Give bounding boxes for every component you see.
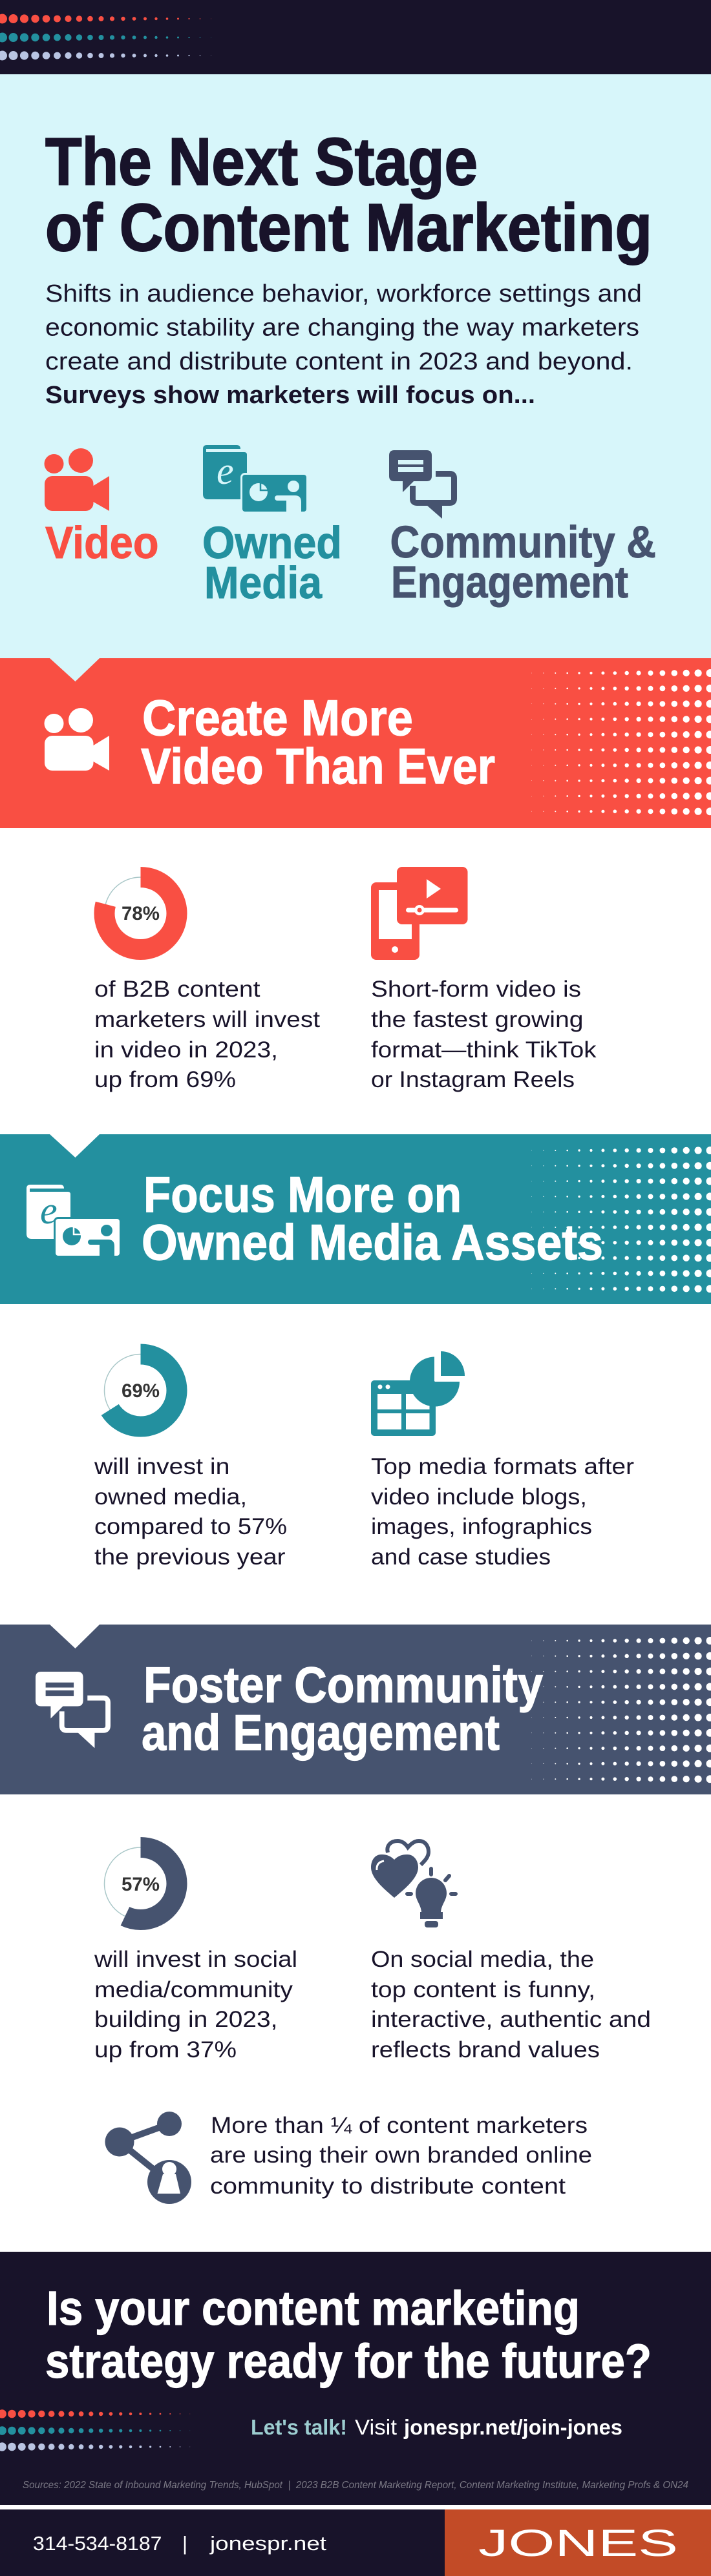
- text: 57 percent stat: media/community: [94, 1977, 293, 2002]
- intro text: [45, 280, 642, 409]
- icon: table and pie chart: [371, 1351, 465, 1436]
- text: phone and website: 314-534-8187: [33, 2532, 162, 2555]
- text: visit link: jonespr.net/join-jones: [403, 2415, 622, 2439]
- text: visit link: Let's talk!: [251, 2415, 347, 2439]
- panel: video stats: [0, 828, 711, 1134]
- text: 57 percent stat: up from 37%: [94, 2037, 237, 2062]
- panel: footer: [0, 2505, 711, 2576]
- icon: video camera white: [44, 708, 109, 771]
- text: social media content: On social media, the: [371, 1947, 594, 1972]
- icon: chat bubbles: [389, 450, 454, 519]
- text: short-form video: or Instagram Reels: [371, 1067, 575, 1092]
- heading: call to action: strategy ready for the future?: [45, 2334, 652, 2388]
- dotted strips: [0, 2409, 190, 2451]
- intro text: economic stability are changing the way marketers: [45, 314, 639, 341]
- text: 78 percent stat: of B2B content: [94, 977, 260, 1002]
- text: 78 percent stat: up from 69%: [94, 1067, 236, 1092]
- icon: share network person: [105, 2112, 191, 2204]
- text: short-form video: the fastest growing: [371, 1007, 583, 1032]
- top dark band with dotted strips: [0, 0, 711, 74]
- panel: intro: [0, 74, 711, 659]
- panel: video banner: [0, 658, 711, 828]
- text: visit link: Visit: [355, 2415, 397, 2439]
- text: 69 percent stat: the previous year: [94, 1544, 286, 1570]
- heading: create more video: Video Than Ever: [141, 738, 495, 795]
- label: owned media: Owned: [202, 517, 342, 568]
- heading: focus more on owned media: [142, 1166, 603, 1271]
- text: phone and website: jonespr.net: [209, 2532, 326, 2555]
- icon: owned media: [203, 445, 306, 512]
- panel: owned media stats: [0, 1304, 711, 1625]
- text: short-form video: Short-form video is: [371, 977, 581, 1002]
- chart: donut 78%: [105, 877, 177, 950]
- panel: community banner: [0, 1625, 711, 1794]
- text: sources: Sources: 2022 State of Inbound Marketing Trends, HubSpot | 2023 B2B Content Marketing Report, Content Marketing Institute, Marketing Profs & ON24: [23, 2480, 688, 2491]
- text: 78 percent stat: [94, 977, 320, 1092]
- text: visit link: [251, 2415, 622, 2439]
- panel: community stats: [0, 1794, 711, 2252]
- heading: focus more on owned media: Focus More on: [143, 1166, 462, 1223]
- text: 69 percent stat: owned media,: [94, 1484, 247, 1510]
- text: 78 percent stat: in video in 2023,: [94, 1037, 278, 1063]
- text: social media content: interactive, authentic and: [371, 2007, 651, 2032]
- panel: owned media banner: [0, 1134, 711, 1304]
- text: branded community: community to distribute content: [210, 2174, 566, 2199]
- text: 69 percent stat: compared to 57%: [94, 1514, 287, 1539]
- heading: call to action: [45, 2281, 652, 2388]
- text: top media formats: images, infographics: [371, 1514, 592, 1539]
- heading: focus more on owned media: Owned Media Assets: [142, 1214, 603, 1271]
- heading: call to action: Is your content marketing: [47, 2281, 580, 2335]
- text: short-form video: [371, 977, 597, 1092]
- text: 57 percent stat: [94, 1947, 297, 2062]
- text: phone and website: |: [182, 2532, 187, 2555]
- icon: owned media: e: [217, 450, 234, 492]
- text: 69 percent stat: [94, 1454, 287, 1570]
- icon: owned media white: [27, 1185, 120, 1256]
- text: social media content: reflects brand values: [371, 2037, 600, 2062]
- title: [45, 125, 652, 265]
- heading: create more video: Create More: [142, 689, 413, 746]
- label: video: Video: [45, 517, 159, 568]
- text: social media content: top content is funny,: [371, 1977, 595, 2002]
- label: community and engagement: Engagement: [391, 557, 628, 607]
- text: 57 percent stat: will invest in social: [94, 1947, 297, 1972]
- text: top media formats: Top media formats after: [371, 1454, 634, 1479]
- text: 57 percent stat: building in 2023,: [94, 2007, 278, 2032]
- label: owned media: Media: [204, 557, 323, 608]
- text: 69 percent stat: will invest in: [94, 1454, 230, 1479]
- icon: hearts and light bulb: [371, 1841, 456, 1927]
- icon: video camera: [44, 448, 109, 511]
- heading: create more video: [141, 689, 495, 795]
- text: branded community: are using their own branded online: [210, 2143, 592, 2168]
- text: top media formats: video include blogs,: [371, 1484, 587, 1510]
- text: top media formats: [371, 1454, 634, 1570]
- text: short-form video: format—think TikTok: [371, 1037, 597, 1063]
- text: phone and website: [33, 2532, 326, 2555]
- icon: chat bubbles white: [36, 1672, 108, 1748]
- label: community and engagement: Community &: [390, 517, 656, 567]
- icon: owned media white: e: [40, 1189, 58, 1232]
- heading: foster community: [142, 1656, 543, 1761]
- text: top media formats: and case studies: [371, 1544, 551, 1570]
- label: community and engagement: [390, 517, 656, 607]
- text: social media content: [371, 1947, 651, 2062]
- intro text: Surveys show marketers will focus on...: [45, 382, 535, 409]
- intro text: create and distribute content in 2023 and beyond.: [45, 348, 633, 375]
- chart: donut 69%: [105, 1354, 177, 1426]
- icon: phone with video: [371, 867, 468, 960]
- text: branded community: [210, 2113, 592, 2199]
- chart: donut 57%: 57%: [122, 1874, 160, 1895]
- title: The Next Stage: [45, 125, 478, 200]
- logo: jones: JONES: [478, 2522, 678, 2564]
- text: branded community: More than ¼ of content marketers: [211, 2113, 588, 2138]
- chart: donut 69%: 69%: [122, 1380, 160, 1402]
- intro text: Shifts in audience behavior, workforce settings and: [45, 280, 642, 307]
- label: owned media: [202, 517, 342, 608]
- text: 78 percent stat: marketers will invest: [94, 1007, 320, 1032]
- heading: foster community: and Engagement: [142, 1704, 500, 1761]
- panel: call to action: [0, 2252, 711, 2505]
- heading: foster community: Foster Community: [143, 1656, 543, 1713]
- title: of Content Marketing: [45, 191, 652, 265]
- chart: donut 57%: [105, 1847, 177, 1920]
- chart: donut 78%: 78%: [122, 903, 160, 924]
